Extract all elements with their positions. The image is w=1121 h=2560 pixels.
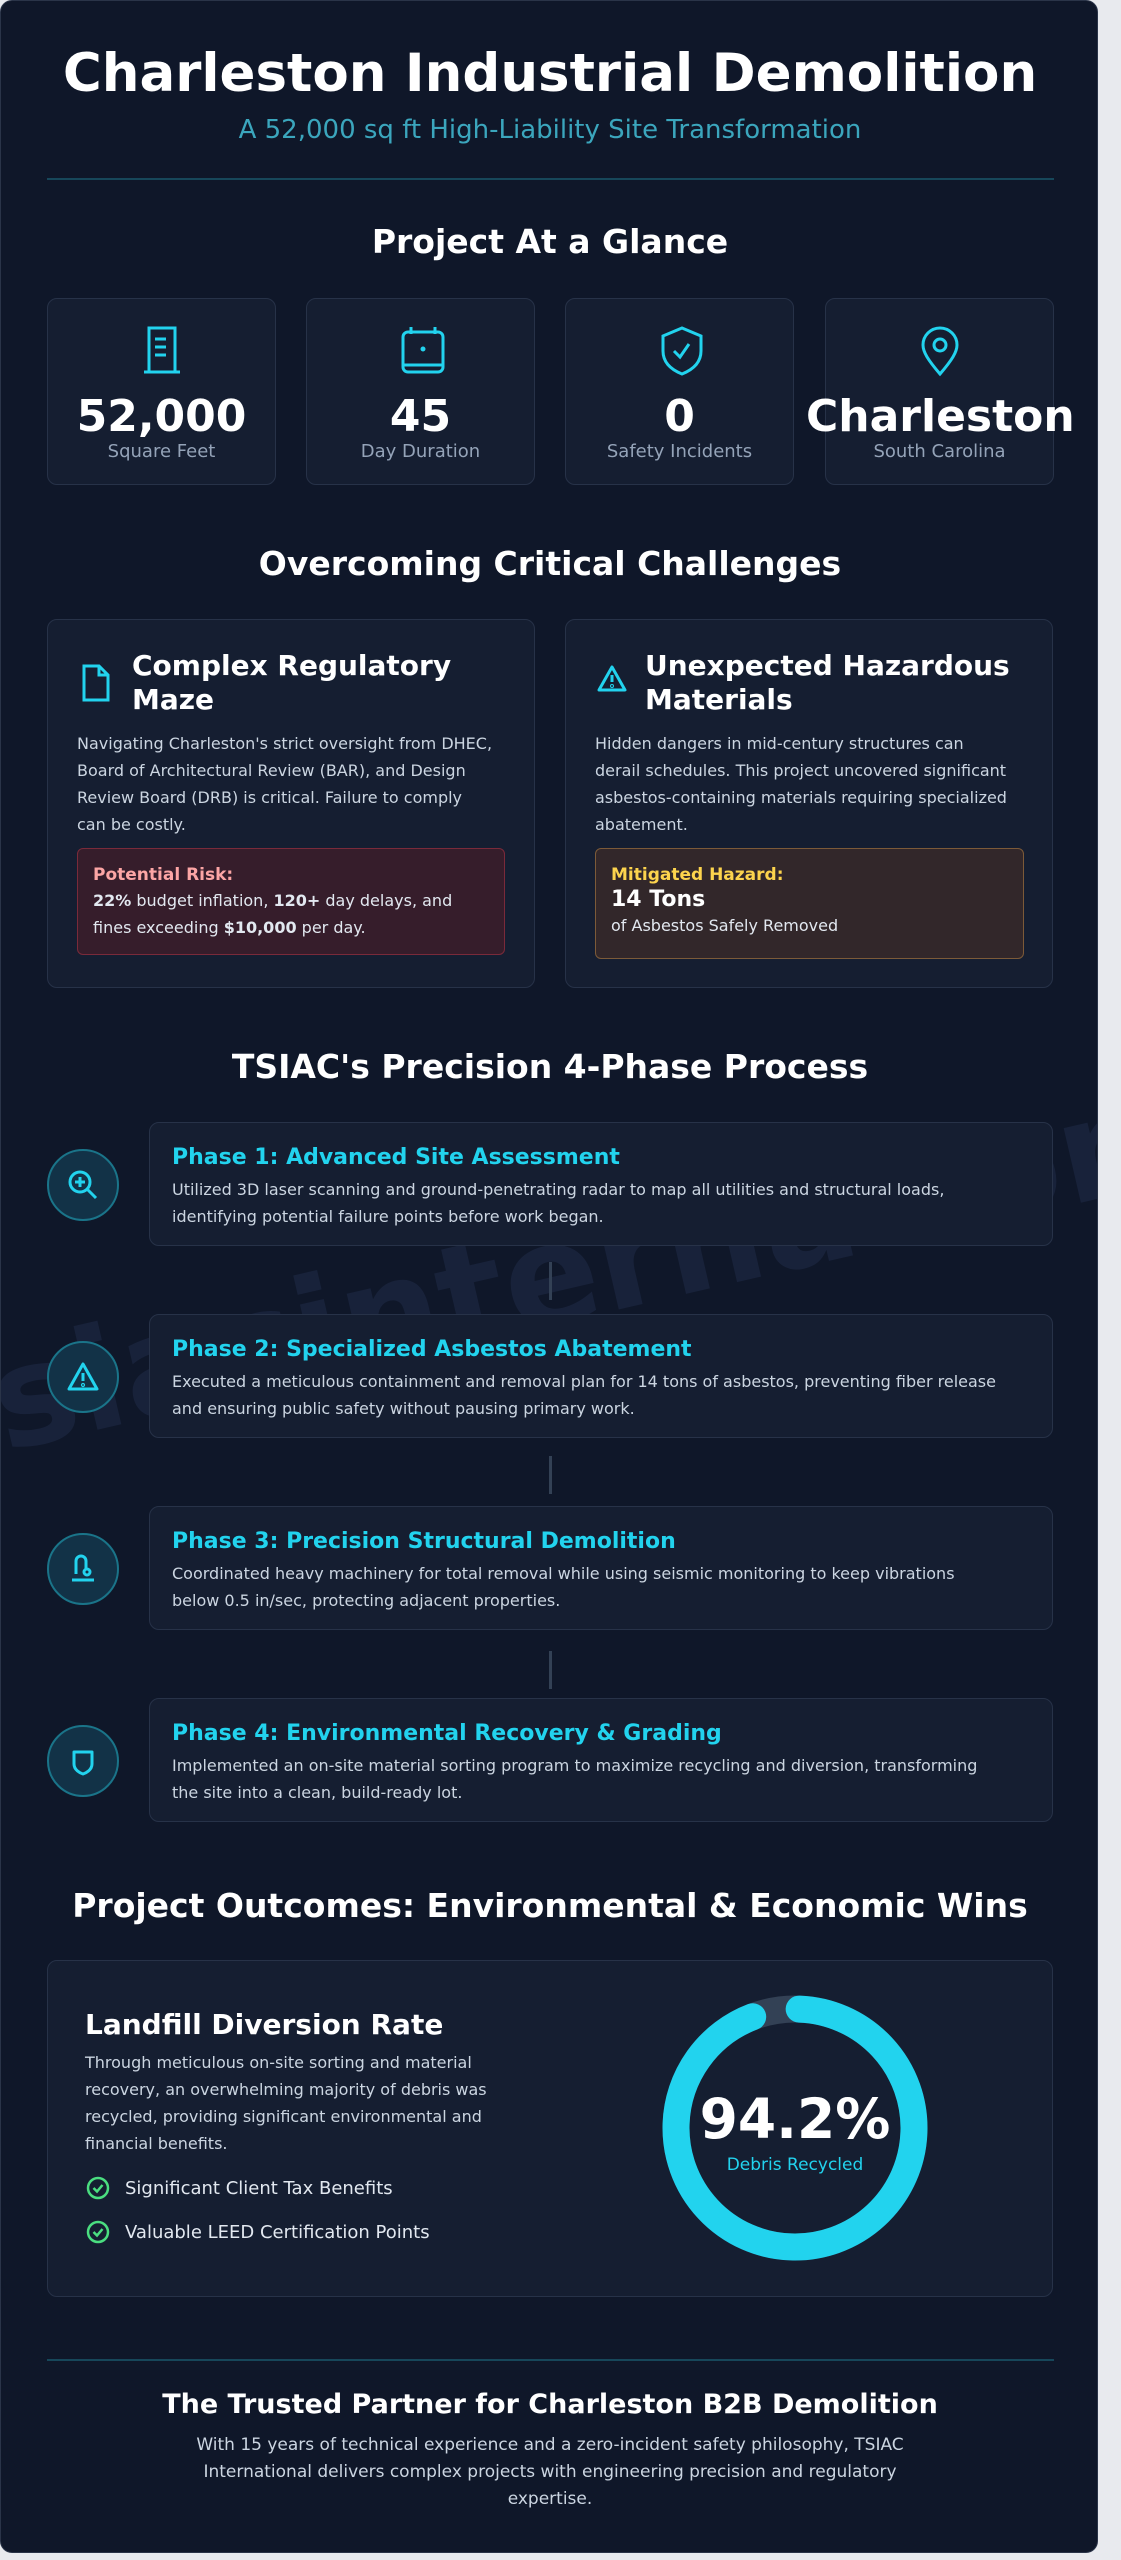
callout: hazard: Mitigated Hazard:	[611, 865, 784, 885]
phase 4: Implemented an on-site material sorting program to maximize recycling and diversion, transforming	[172, 1756, 977, 1775]
phase 3: below 0.5 in/sec, protecting adjacent properties.	[172, 1591, 560, 1610]
heading: challenges: Overcoming Critical Challenges	[259, 544, 841, 583]
callout: hazard: of Asbestos Safely Removed	[611, 916, 838, 935]
phase 3: Phase 3: Precision Structural Demolition	[172, 1529, 676, 1554]
donut chart: Debris Recycled	[727, 2155, 863, 2175]
text: Through meticulous on-site sorting and material recovery, an overwhelming majority of debris was recycled, providing significant environmental and financial benefits.	[85, 2053, 487, 2153]
panel: landfill diversion	[47, 1960, 1053, 2297]
phase 4	[47, 1698, 1053, 1822]
checklist: Valuable LEED Certification Points	[125, 2222, 430, 2242]
icon: recovery	[47, 1725, 119, 1797]
text: Hidden dangers in mid-century structures can derail schedules. This project uncovered significant asbestos-containing materials requiring specialized abatement.	[595, 734, 1007, 834]
icon: machinery	[47, 1533, 119, 1605]
heading: outcomes: Project Outcomes: Environmental & Economic Wins	[72, 1886, 1028, 1925]
heading: Landfill Diversion Rate	[85, 2008, 443, 2041]
phase 2: Executed a meticulous containment and removal plan for 14 tons of asbestos, preventing fiber release	[172, 1372, 996, 1391]
stat card: square feet	[47, 298, 276, 485]
checklist	[86, 2176, 430, 2244]
heading: Complex Regulatory	[132, 649, 451, 682]
stat card: location: South Carolina	[873, 441, 1006, 462]
stat card: days	[306, 298, 535, 485]
icon: warning	[47, 1341, 119, 1413]
callout: hazard	[595, 848, 1024, 959]
stat card: safety: 0	[664, 391, 695, 442]
icon: pin	[922, 326, 958, 376]
heading: Unexpected Hazardous	[645, 649, 1010, 682]
heading: Materials	[645, 683, 793, 716]
stat card: days: 45	[390, 391, 451, 442]
heading: process: TSIAC's Precision 4-Phase Process	[232, 1047, 868, 1086]
stat card: square feet: 52,000	[77, 391, 246, 442]
donut chart	[662, 1996, 928, 2260]
stat card: safety: Safety Incidents	[607, 441, 752, 462]
phase 2: Phase 2: Specialized Asbestos Abatement	[172, 1337, 692, 1362]
footer heading: The Trusted Partner for Charleston B2B Demolition	[162, 2389, 938, 2420]
phase 4: the site into a clean, build-ready lot.	[172, 1783, 462, 1802]
callout: risk: 22% budget inflation, 120+ day delays, and fines exceeding $10,000 per day.	[93, 891, 452, 937]
phase 4: Phase 4: Environmental Recovery & Grading	[172, 1721, 722, 1746]
panel: regulatory maze	[47, 619, 535, 988]
callout: risk	[77, 848, 505, 955]
phase 1: Phase 1: Advanced Site Assessment	[172, 1145, 620, 1170]
stat card: location	[825, 298, 1054, 485]
donut chart: 94.2%	[700, 2087, 890, 2151]
heading	[645, 649, 1010, 716]
icon: calendar	[402, 327, 444, 374]
subtitle: A 52,000 sq ft High-Liability Site Transformation	[239, 115, 861, 145]
stat card: days: Day Duration	[361, 441, 480, 462]
text: can be costly.	[77, 815, 186, 834]
icon: zoom	[47, 1149, 119, 1221]
phase 1	[47, 1122, 1053, 1246]
icon: building	[144, 326, 180, 374]
stat card: square feet: Square Feet	[108, 441, 215, 462]
callout: risk: Potential Risk:	[93, 865, 233, 885]
phase 3	[47, 1506, 1053, 1630]
phase 1: Utilized 3D laser scanning and ground-penetrating radar to map all utilities and structural loads, identifying potential failure points before work began.	[172, 1180, 944, 1226]
icon: shield	[662, 326, 702, 376]
heading: project at a glance: Project At a Glance	[372, 222, 728, 261]
title: Charleston Industrial Demolition	[63, 43, 1037, 104]
panel: hazardous materials	[565, 619, 1053, 988]
stat card: location: Charleston	[806, 391, 1075, 442]
icon: document	[82, 664, 110, 702]
stat card: safety	[565, 298, 794, 485]
phase 3: Coordinated heavy machinery for total removal while using seismic monitoring to keep vibrations	[172, 1564, 955, 1583]
text: Navigating Charleston's strict oversight from DHEC, Board of Architectural Review (BAR), and Design Review Board (DRB) is critical. Failure to comply	[77, 734, 492, 807]
checklist: Significant Client Tax Benefits	[125, 2178, 393, 2198]
phase 2: and ensuring public safety without pausing primary work.	[172, 1399, 635, 1418]
icon: warning	[598, 665, 627, 692]
heading	[132, 649, 451, 716]
callout: hazard: 14 Tons	[611, 887, 705, 912]
footer text: With 15 years of technical experience and a zero-incident safety philosophy, TSIAC International delivers complex projects with engineering precision and regulatory expertise.	[196, 2435, 904, 2509]
phase 2	[47, 1314, 1053, 1438]
heading: Maze	[132, 683, 214, 716]
